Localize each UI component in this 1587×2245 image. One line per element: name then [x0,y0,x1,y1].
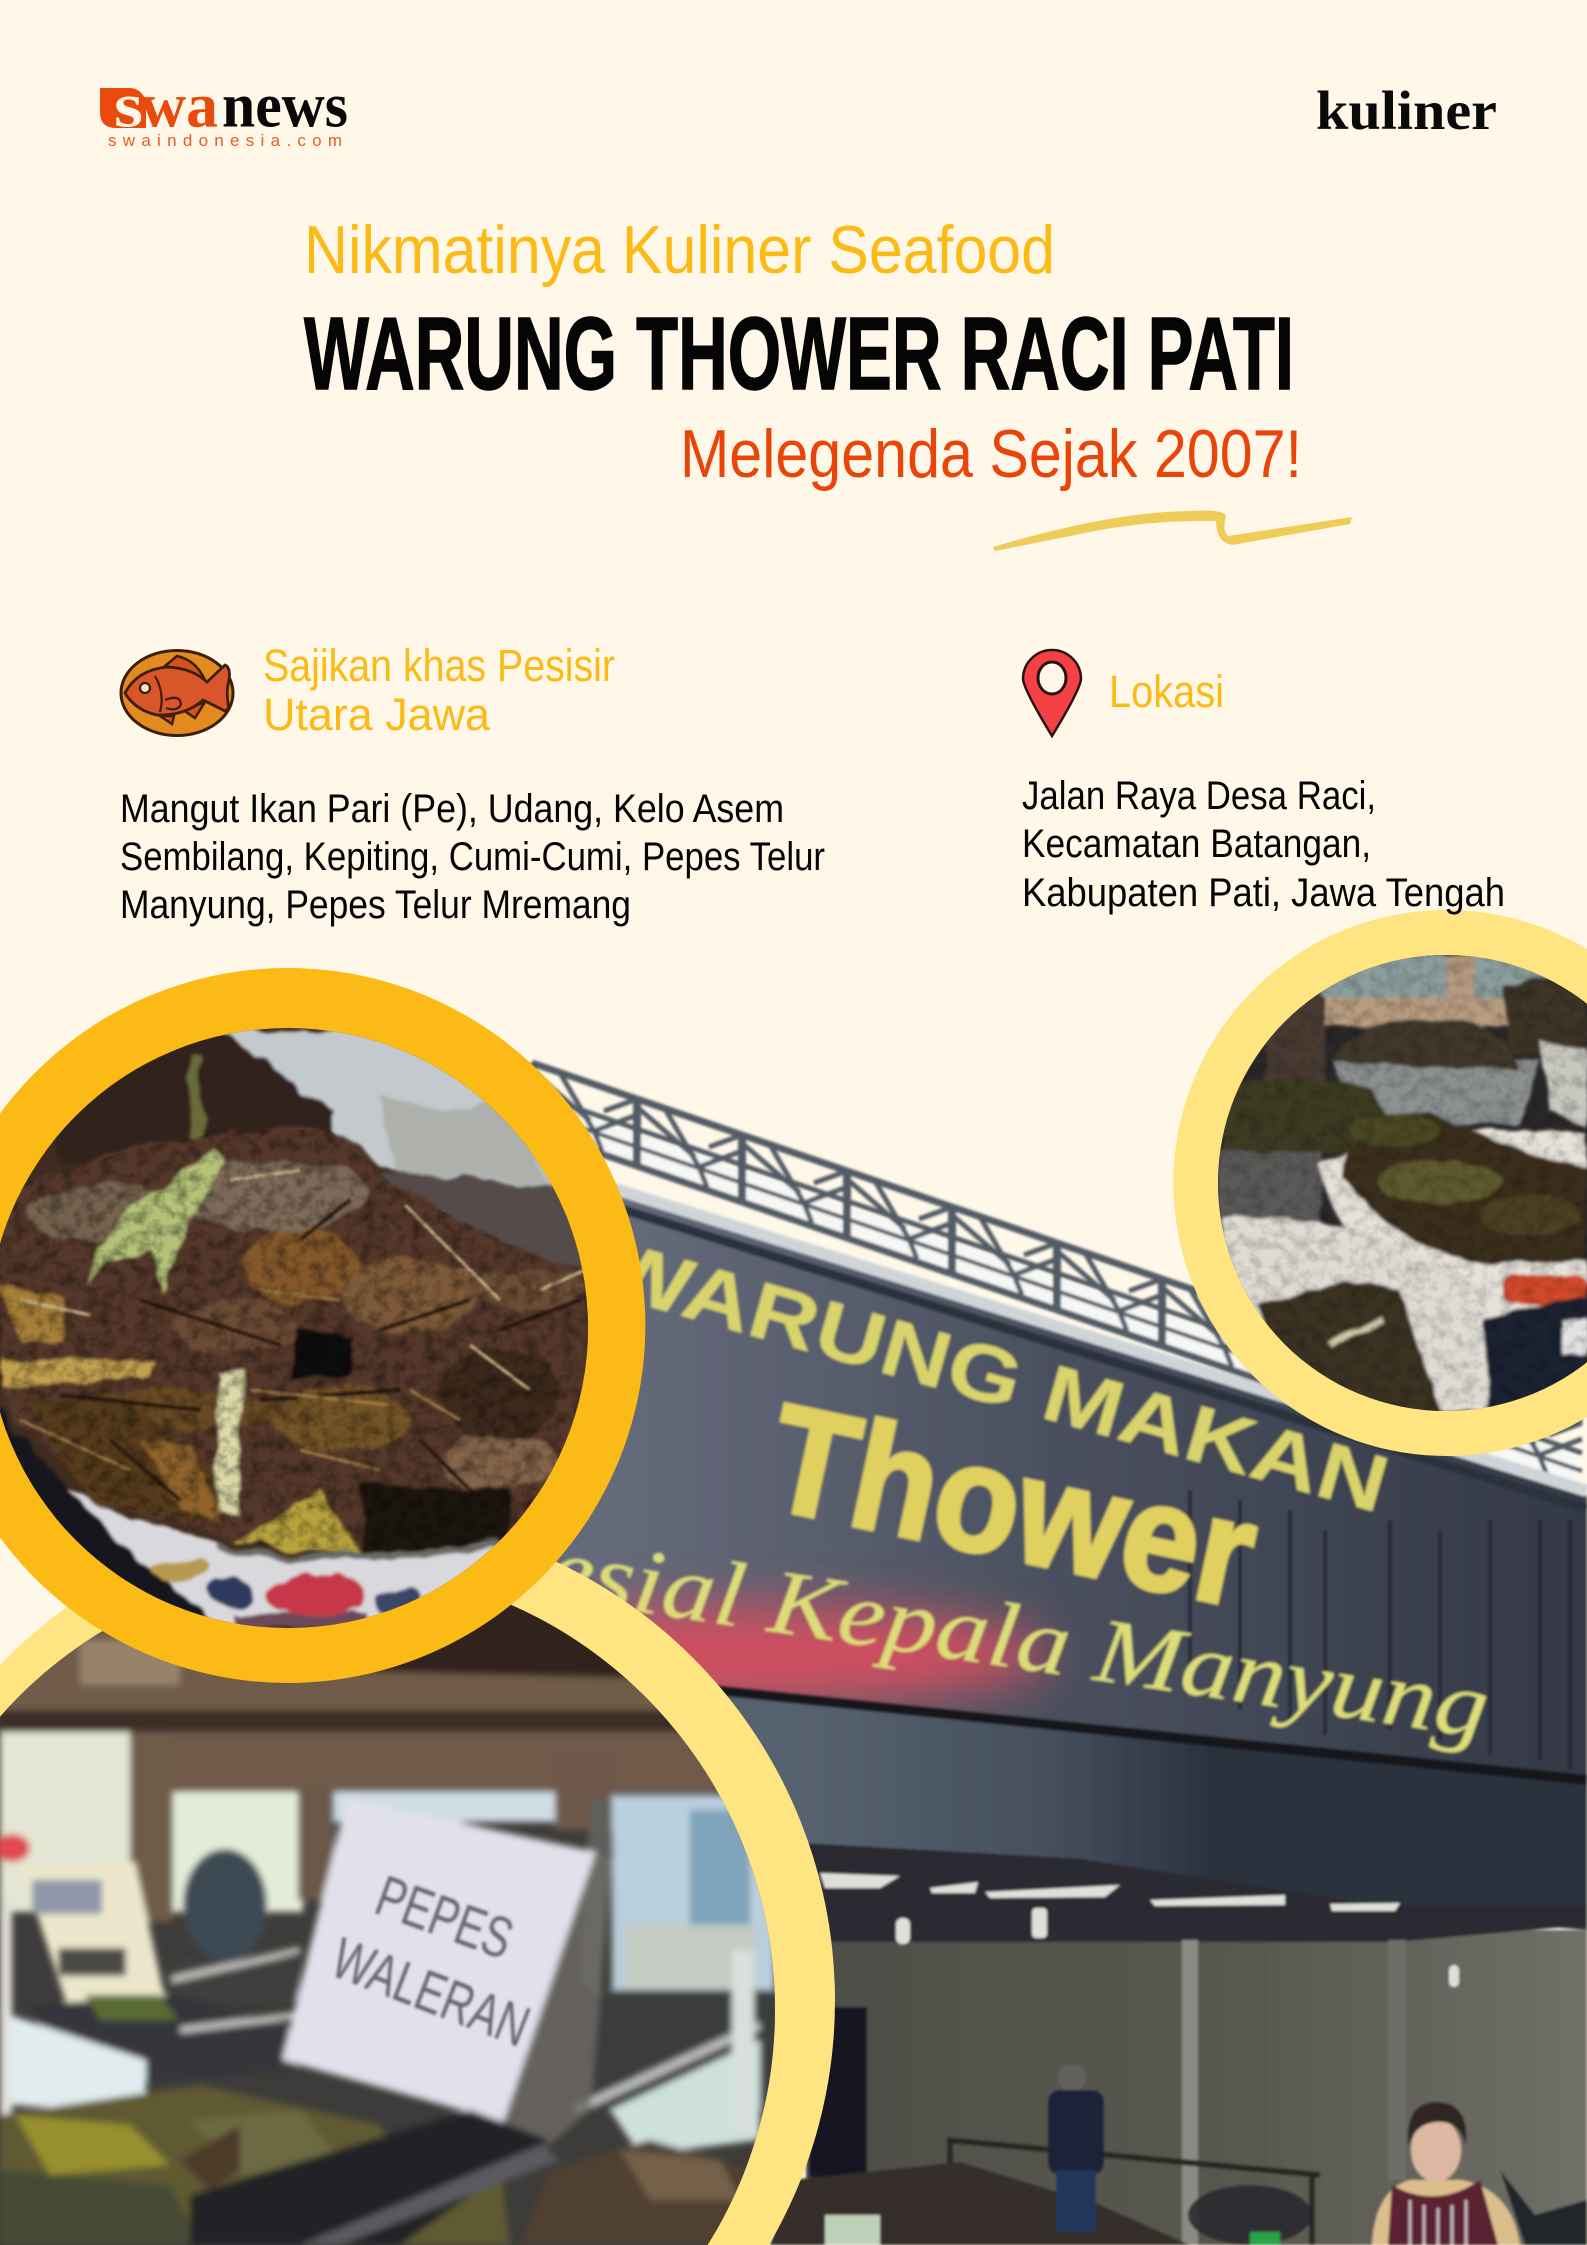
pale yellow ring: bottom left [0,1516,835,2245]
address line 3: Kabupaten Pati, Jawa Tengah [1022,871,1505,915]
sign text: warung makan: WARUNG MAKAN [592,1223,1398,1529]
person in blue [1048,2064,1104,2232]
sign text: thower: Thower [755,1372,1270,1640]
logo url: swaindonesia.com [108,131,342,150]
category label: kuliner [1316,80,1497,141]
logo mark [100,88,146,128]
sign text: spesial kepala manyung: Spesial Kepala Manyung [437,1501,1496,1758]
address line 1: Jalan Raya Desa Raci, [1022,774,1376,818]
sign stripes [1190,1490,1570,1770]
photo grain [0,1130,588,1555]
subheading line 2: Utara Jawa [263,689,491,740]
logo word swa: wa [140,70,218,140]
photo grain [1218,955,1587,1411]
orange ring [0,968,645,1683]
floor clutter [770,2162,1190,2245]
poles [1182,1940,1406,2245]
roof truss [532,1063,1582,1490]
title line 3: Melegenda Sejak 2007! [680,416,1302,492]
menu line 3: Manyung, Pepes Telur Mremang [120,883,631,927]
body: menu list [120,787,825,927]
label: waleran: WALERAN [323,1925,538,2060]
yellow ring: top right [1173,910,1587,1456]
red gradient of sign [410,1605,1050,1705]
motorcycle [1500,2170,1587,2245]
card text: pepes waleran [334,1874,532,2048]
bench [947,2140,1320,2245]
logo letter s: s [114,70,143,140]
shop wall [806,1930,1587,2245]
label: pepes: PEPES [368,1863,521,1972]
food fibres [20,1170,585,1500]
squiggle underline [993,511,1352,551]
photo: pepes waleran stall [0,1567,775,2245]
body: address [1022,774,1505,915]
subheading line 1: Sajikan khas Pesisir [263,640,615,691]
logo word news: news [222,70,348,140]
lower fascia [714,1688,1587,1930]
white beam [560,1172,1587,1491]
ceiling [806,1843,1587,1942]
sign board [540,1170,1587,1778]
photo: bowls of pepes [1218,955,1587,1411]
photo: warung building [410,1063,1587,2245]
title line 1: Nikmatinya Kuliner Seafood [304,212,1055,288]
ceiling lights [820,1873,1459,1987]
photo: mangut ikan [0,1028,588,1628]
subheading: sajian khas [263,640,615,740]
icon: location pin [1023,650,1081,736]
menu line 1: Mangut Ikan Pari (Pe), Udang, Kelo Asem [120,787,784,831]
address line 2: Kecamatan Batangan, [1022,822,1371,866]
woman [1372,2102,1520,2245]
subheading: lokasi: Lokasi [1109,666,1224,717]
icon: fish [121,650,233,736]
menu line 2: Sembilang, Kepiting, Cumi-Cumi, Pepes Telur [120,835,825,879]
door [809,2007,867,2177]
logo: swanews [100,70,348,150]
